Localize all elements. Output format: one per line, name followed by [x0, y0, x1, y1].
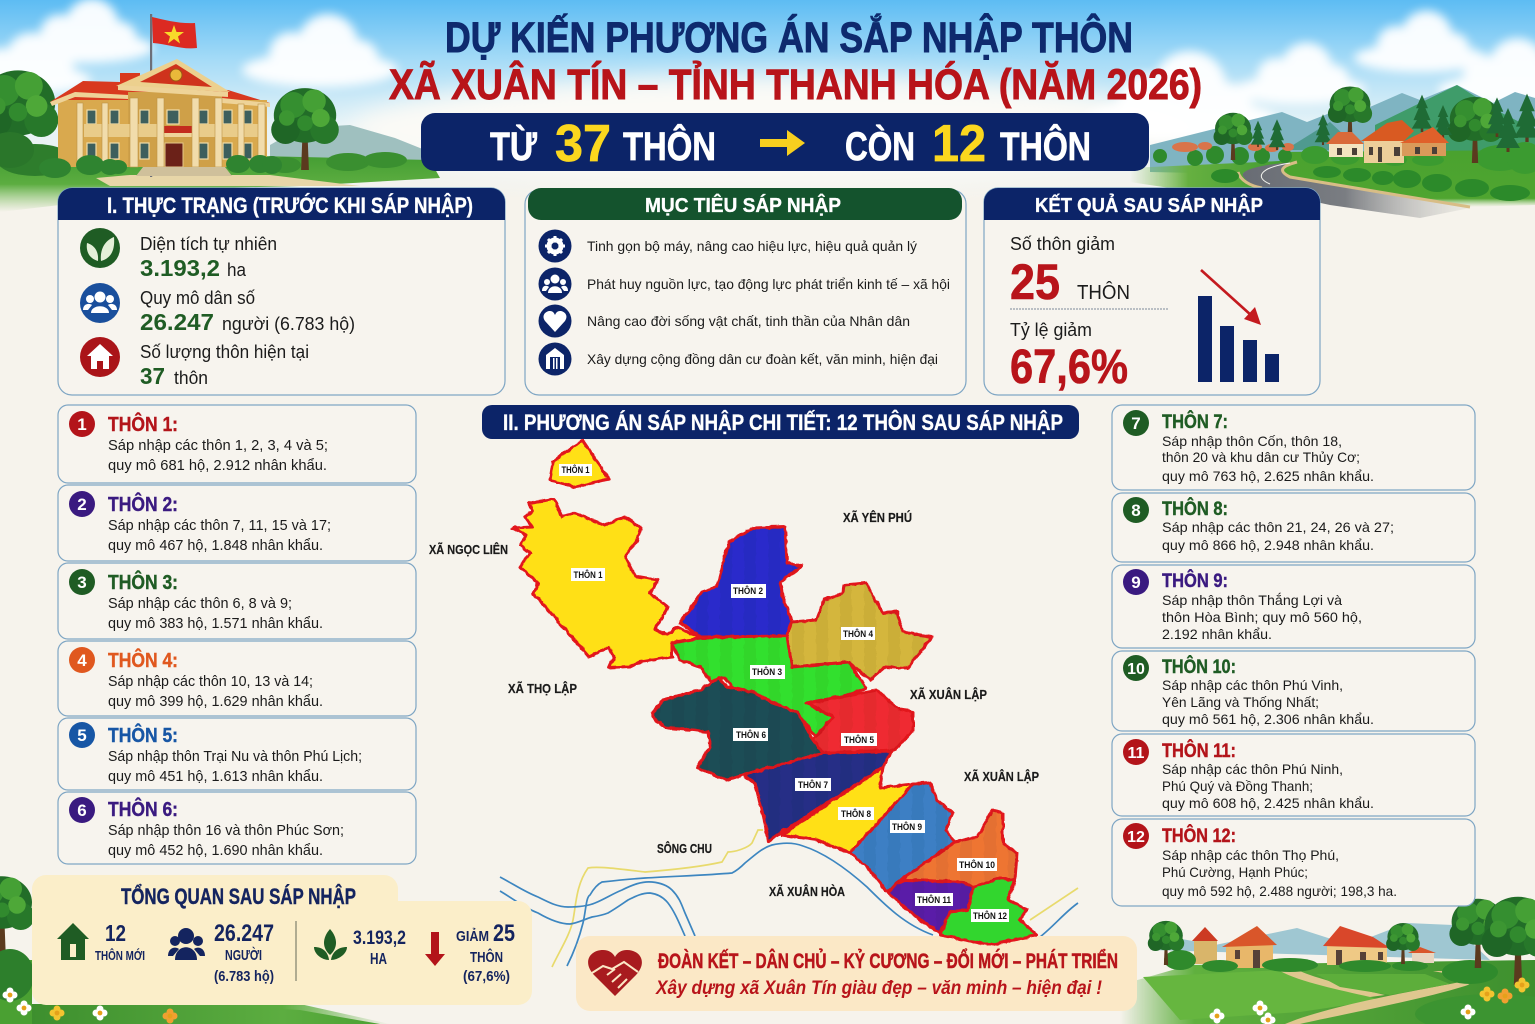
stat: villages reduced: 25 [1010, 254, 1060, 310]
title: DỰ KIẾN PHƯƠNG ÁN SẮP NHẬP THÔN [445, 13, 1133, 62]
card: Thôn 5: quy mô 451 hộ, 1.613 nhân khẩu. [108, 769, 323, 785]
banner: slogan [576, 936, 1137, 1011]
stat: population: NGƯỜI [225, 946, 262, 964]
icon: road [1238, 162, 1470, 218]
card: Thôn 8: Sáp nhập các thôn 21, 24, 26 và 27; [1162, 519, 1394, 535]
card: Thôn 4 [58, 641, 416, 716]
icon: people [80, 283, 120, 323]
heading: overview: TỔNG QUAN SAU SÁP NHẬP [121, 884, 356, 909]
card: Thôn 11: THÔN 11: [1162, 740, 1236, 762]
stat: decrease: THÔN [470, 948, 503, 966]
card: Thôn 1: 1 [77, 415, 87, 434]
card: Thôn 6: quy mô 452 hộ, 1.690 nhân khẩu. [108, 843, 323, 859]
stat: villages reduced: Số thôn giảm [1010, 234, 1115, 254]
heading: detailed plan: II. PHƯƠNG ÁN SÁP NHẬP CHI TIẾT: 12 THÔN SAU SÁP NHẬP [503, 410, 1063, 435]
map labels: THÔN 2 [733, 585, 763, 596]
map: neighbouring commune labels: XÃ XUÂN LẬP [964, 769, 1039, 784]
card: Thôn 1: Sáp nhập các thôn 1, 2, 3, 4 và 5; [108, 438, 328, 454]
map labels: THÔN 4 [843, 628, 873, 639]
card: Thôn 3 [58, 563, 416, 639]
map: neighbouring commune labels: SÔNG CHU [657, 841, 712, 856]
text: number of villages [140, 342, 309, 389]
stat: population: 26.247 [214, 920, 274, 947]
panel: current status [58, 188, 505, 395]
card: Thôn 6: THÔN 6: [108, 797, 178, 821]
card: Thôn 8: 8 [1131, 501, 1141, 520]
card: Thôn 12: 12 [1127, 829, 1145, 846]
card: Thôn 8 [1112, 493, 1475, 562]
map: neighbouring commune labels: XÃ XUÂN LẬP [910, 687, 987, 702]
map labels: THÔN 10 [959, 859, 995, 870]
banner: from 37 to 12: 12 [932, 115, 986, 173]
icon: community gate [538, 342, 572, 376]
arrow: decrease [425, 932, 445, 966]
card: Thôn 9: THÔN 9: [1162, 570, 1228, 592]
text: number of villages: thôn [174, 368, 208, 388]
stat: new villages: 12 [105, 920, 126, 946]
card: Thôn 3: Sáp nhập các thôn 6, 8 và 9; [108, 596, 292, 612]
map labels: THÔN 7 [798, 779, 828, 790]
card: Thôn 3: quy mô 383 hộ, 1.571 nhân khẩu. [108, 616, 323, 632]
map labels: THÔN 5 [844, 734, 874, 745]
stat: villages reduced: THÔN [1077, 281, 1130, 304]
card: Thôn 5: Sáp nhập thôn Trại Nu và thôn Phú Lịch; [108, 749, 362, 765]
rivers [500, 830, 1078, 967]
map labels [559, 464, 1009, 922]
icon: new villages house [57, 923, 89, 960]
card: Thôn 2: quy mô 467 hộ, 1.848 nhân khẩu. [108, 538, 323, 554]
banner: slogan: Xây dựng xã Xuân Tín giàu đẹp – văn minh – hiện đại ! [655, 978, 1102, 999]
card: Thôn 4: THÔN 4: [108, 648, 178, 672]
icon: village houses [1192, 926, 1436, 968]
icon: leaf [80, 228, 120, 268]
panel: results [984, 188, 1320, 395]
sky background [0, 0, 1535, 200]
card: Thôn 10: Sáp nhập các thôn Phú Vinh, [1162, 677, 1343, 693]
card: Thôn 8: quy mô 866 hộ, 2.948 nhân khẩu. [1162, 537, 1374, 553]
text: population: Quy mô dân số [140, 288, 255, 308]
card: Thôn 11 [1112, 734, 1475, 816]
card: Thôn 11: quy mô 608 hộ, 2.425 nhân khẩu. [1162, 795, 1374, 811]
card: Thôn 3: THÔN 3: [108, 570, 178, 594]
stat: decrease: (67,6%) [463, 968, 510, 985]
card: Thôn 5: 5 [77, 726, 87, 745]
text: natural area: Diện tích tự nhiên [140, 234, 277, 254]
banner: slogan: ĐOÀN KẾT – DÂN CHỦ – KỶ CƯƠNG – ĐỔI MỚI – PHÁT TRIỂN [658, 949, 1118, 973]
card: Thôn 5 [58, 718, 416, 790]
banner: from 37 to 12 [421, 113, 1149, 173]
banner: from 37 to 12: TỪ [490, 123, 538, 169]
goal text 2: Phát huy nguồn lực, tạo động lực phát triển kinh tế – xã hội [587, 276, 950, 292]
card: Thôn 12: Phú Cường, Hạnh Phúc; [1162, 864, 1308, 880]
card: Thôn 6 [58, 792, 416, 864]
icon: heart and handshake [588, 950, 642, 996]
card: Thôn 7: 7 [1131, 414, 1141, 433]
card: Thôn 9: 9 [1131, 573, 1141, 592]
card: Thôn 7: Sáp nhập thôn Cốn, thôn 18, [1162, 433, 1342, 449]
title: XÃ XUÂN TÍN – TỈNH THANH HÓA (NĂM 2026) [389, 60, 1202, 109]
card: Thôn 9: Sáp nhập thôn Thắng Lợi và [1162, 592, 1342, 608]
icon: leaf area [314, 929, 347, 960]
card: Thôn 2 [58, 485, 416, 561]
text: population: 26.247 [140, 309, 214, 335]
card: Thôn 2: Sáp nhập các thôn 7, 11, 15 và 17; [108, 518, 331, 534]
card: Thôn 12: Sáp nhập các thôn Thọ Phú, [1162, 847, 1339, 863]
map labels: THÔN 12 [973, 910, 1007, 921]
card: Thôn 7: THÔN 7: [1162, 411, 1228, 433]
stat: new villages [95, 920, 145, 963]
map labels: THÔN 11 [917, 894, 951, 905]
card: Thôn 9: 2.192 nhân khẩu. [1162, 626, 1272, 642]
banner: from 37 to 12: THÔN [623, 123, 716, 169]
card: Thôn 4: quy mô 399 hộ, 1.629 nhân khẩu. [108, 694, 323, 710]
map: commune villages [513, 441, 1037, 945]
text: population [140, 288, 355, 335]
text: natural area: 3.193,2 [140, 255, 220, 281]
card: Thôn 3: 3 [77, 573, 87, 592]
heading: detailed plan [482, 405, 1079, 439]
icon: team [538, 268, 572, 300]
map labels: THÔN 9 [892, 821, 922, 832]
stat: reduction rate [1010, 320, 1128, 394]
map labels: THÔN 8 [841, 808, 871, 819]
card: Thôn 4: Sáp nhập các thôn 10, 13 và 14; [108, 674, 313, 690]
scene: village with path, bottom right [1120, 897, 1535, 1024]
map labels: THÔN 3 [752, 666, 782, 677]
scene: commune hall with flag and trees [0, 14, 440, 212]
card: Thôn 11: Phú Quý và Đồng Thanh; [1162, 778, 1313, 794]
map labels: THÔN 1 [574, 569, 602, 580]
stat: decrease: GIẢM [456, 928, 489, 945]
heading: current status: I. THỰC TRẠNG (TRƯỚC KHI SÁP NHẬP) [107, 193, 473, 218]
card: Thôn 6: 6 [77, 801, 87, 820]
icon: commune hall building [39, 59, 282, 178]
banner: from 37 to 12: 37 [555, 115, 611, 173]
stat: population: (6.783 hộ) [214, 968, 274, 985]
stat: reduction rate: Tỷ lệ giảm [1010, 320, 1092, 340]
stat: villages reduced [1010, 234, 1130, 310]
text: number of villages: 37 [140, 363, 165, 389]
text: natural area: ha [227, 260, 247, 280]
goal text 1: Tinh gọn bộ máy, nâng cao hiệu lực, hiệu quả quản lý [587, 238, 917, 254]
map labels: THÔN 6 [736, 729, 766, 740]
card: Thôn 12: quy mô 592 hộ, 2.488 người; 198,3 ha. [1162, 883, 1397, 899]
card: Thôn 1 [58, 405, 416, 483]
card: Thôn 8: THÔN 8: [1162, 498, 1228, 520]
card: Thôn 4: 4 [77, 651, 87, 670]
icon: houses [1326, 120, 1449, 163]
card: Thôn 10: 10 [1127, 661, 1145, 678]
card: Thôn 9: thôn Hòa Bình; quy mô 560 hộ, [1162, 609, 1362, 625]
title [389, 13, 1202, 109]
stat: area: 3.193,2 [353, 928, 406, 949]
banner: from 37 to 12: THÔN [1000, 123, 1091, 169]
card: Thôn 9 [1112, 565, 1475, 648]
stat: area: HA [370, 951, 387, 968]
stat: area [353, 928, 406, 968]
map: neighbouring commune labels [429, 510, 1039, 899]
text: population: người (6.783 hộ) [222, 314, 355, 334]
panel: goals [525, 188, 966, 395]
icon: flag [150, 14, 197, 177]
card: Thôn 11: Sáp nhập các thôn Phú Ninh, [1162, 761, 1343, 777]
card: Thôn 6: Sáp nhập thôn 16 và thôn Phúc Sơn; [108, 823, 344, 839]
bar chart: decreasing [1198, 270, 1279, 382]
map: neighbouring commune labels: XÃ NGỌC LIÊN [429, 542, 508, 557]
card: Thôn 2: 2 [77, 495, 87, 514]
icon: population [168, 928, 205, 960]
scene: mountains, houses and road [1130, 85, 1535, 218]
map labels: THÔN 1 [562, 464, 590, 475]
card: Thôn 12 [1112, 819, 1475, 906]
card: Thôn 1: THÔN 1: [108, 412, 178, 436]
stat: new villages: THÔN MỚI [95, 948, 145, 963]
card: Thôn 11: 11 [1128, 745, 1145, 762]
heading: goals: MỤC TIÊU SÁP NHẬP [645, 193, 841, 217]
heading: results: KẾT QUẢ SAU SÁP NHẬP [1035, 193, 1263, 217]
map: neighbouring commune labels: XÃ YÊN PHÚ [843, 510, 912, 525]
stat: reduction rate: 67,6% [1010, 341, 1128, 394]
goal text 4: Xây dựng cộng đồng dân cư đoàn kết, văn minh, hiện đại [587, 351, 938, 367]
icon: house [80, 337, 120, 377]
banner: from 37 to 12: CÒN [845, 123, 915, 169]
map: neighbouring commune labels: XÃ THỌ LẬP [508, 681, 577, 696]
text: natural area [140, 234, 277, 281]
map: neighbouring commune labels: XÃ XUÂN HÒA [769, 884, 846, 899]
card: Thôn 10: Yên Lãng và Thống Nhất; [1162, 694, 1319, 710]
stat: decrease [456, 920, 515, 985]
text: number of villages: Số lượng thôn hiện tại [140, 342, 309, 362]
goal text 3: Nâng cao đời sống vật chất, tinh thần của Nhân dân [587, 313, 910, 329]
card: Thôn 10 [1112, 651, 1475, 731]
card: Thôn 1: quy mô 681 hộ, 2.912 nhân khẩu. [108, 458, 327, 474]
arrow [760, 130, 805, 156]
card: Thôn 10: THÔN 10: [1162, 656, 1236, 678]
card: Thôn 10: quy mô 561 hộ, 2.306 nhân khẩu. [1162, 711, 1374, 727]
card: Thôn 12: THÔN 12: [1162, 825, 1236, 847]
card: Thôn 7: quy mô 763 hộ, 2.625 nhân khẩu. [1162, 468, 1374, 484]
card: Thôn 2: THÔN 2: [108, 492, 178, 516]
icon: gear [538, 230, 572, 262]
card: Thôn 7 [1112, 405, 1475, 490]
stat: population [214, 920, 274, 985]
icon: heart [538, 304, 572, 338]
card: Thôn 7: thôn 20 và khu dân cư Thủy Cơ; [1162, 449, 1360, 465]
card: Thôn 5: THÔN 5: [108, 723, 178, 747]
scene: meadow with tree, bottom left [0, 876, 390, 1024]
panel: overview after merger [32, 875, 532, 1005]
stat: decrease: 25 [493, 920, 515, 947]
